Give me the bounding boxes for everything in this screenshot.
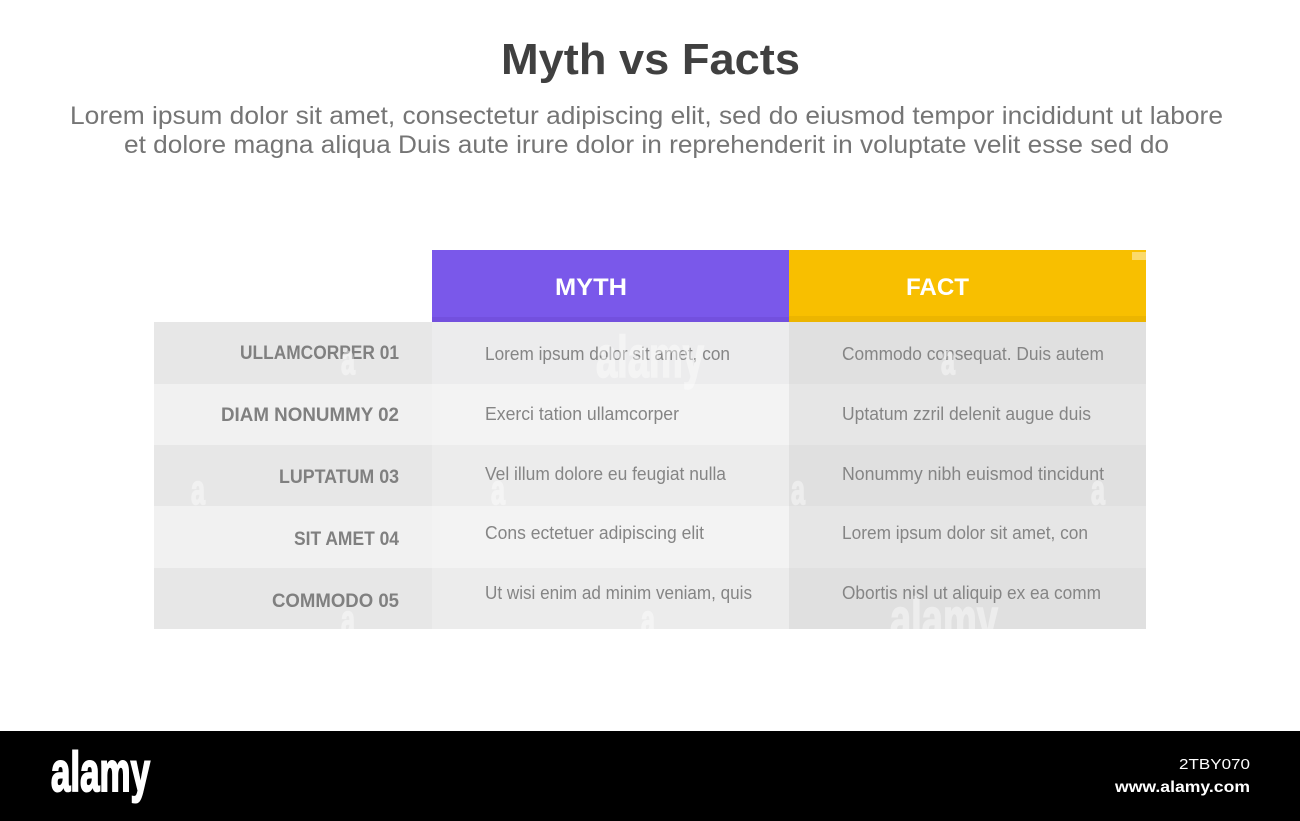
watermark overlay: a bbox=[791, 466, 805, 513]
watermark overlay: a bbox=[191, 466, 205, 513]
watermark overlay: a bbox=[491, 466, 505, 513]
row 5 bbox=[154, 568, 1146, 629]
subtitle text block: et dolore magna aliqua Duis aute irure dolor in reprehenderit in voluptate velit esse sed do bbox=[124, 131, 1169, 159]
row 5: COMMODO 05 bbox=[272, 591, 399, 612]
footer bar bbox=[0, 731, 1300, 821]
row 4: SIT AMET 04 bbox=[294, 529, 399, 550]
row 2: Uptatum zzril delenit augue duis bbox=[842, 404, 1091, 424]
title: Myth vs Facts bbox=[501, 35, 800, 84]
row 3 bbox=[154, 445, 1146, 506]
comparison table bbox=[154, 250, 1146, 629]
subtitle text block: Lorem ipsum dolor sit amet, consectetur adipiscing elit, sed do eiusmod tempor incididunt ut labore bbox=[70, 102, 1223, 130]
row 2: Exerci tation ullamcorper bbox=[485, 404, 679, 424]
watermark overlay: a bbox=[1091, 466, 1105, 513]
row 3: Nonummy nibh euismod tincidunt bbox=[842, 464, 1104, 484]
row 2: DIAM NONUMMY 02 bbox=[221, 405, 399, 426]
watermark overlay: a bbox=[341, 596, 355, 643]
watermark overlay: alamy bbox=[890, 587, 998, 652]
image id: 2TBY070 bbox=[1179, 757, 1250, 773]
row 1: ULLAMCORPER 01 bbox=[240, 343, 399, 364]
row 1: Commodo consequat. Duis autem bbox=[842, 344, 1104, 364]
header: myth bbox=[432, 250, 789, 322]
watermark overlay: a bbox=[641, 596, 655, 643]
watermark overlay: a bbox=[941, 336, 955, 383]
row 4: Lorem ipsum dolor sit amet, con bbox=[842, 523, 1088, 543]
row 5: Obortis nisl ut aliquip ex ea comm bbox=[842, 583, 1101, 603]
header: fact bbox=[789, 250, 1146, 322]
header: fact: FACT bbox=[906, 274, 969, 301]
watermark overlay bbox=[191, 252, 1146, 652]
row 3: Vel illum dolore eu feugiat nulla bbox=[485, 464, 727, 484]
row 1: Lorem ipsum dolor sit amet, con bbox=[485, 344, 730, 364]
row 2 bbox=[154, 384, 1146, 445]
watermark overlay: alamy bbox=[596, 325, 704, 390]
header: myth: MYTH bbox=[555, 274, 627, 301]
row 4 bbox=[154, 506, 1146, 568]
footer url: www.alamy.com bbox=[1114, 779, 1250, 796]
watermark overlay: a bbox=[341, 336, 355, 383]
row 1 bbox=[154, 322, 1146, 384]
row 4: Cons ectetuer adipiscing elit bbox=[485, 523, 704, 543]
subtitle text block bbox=[70, 102, 1223, 159]
footer logo: alamy bbox=[51, 740, 150, 803]
row 5: Ut wisi enim ad minim veniam, quis bbox=[485, 583, 752, 603]
row 3: LUPTATUM 03 bbox=[279, 467, 399, 488]
